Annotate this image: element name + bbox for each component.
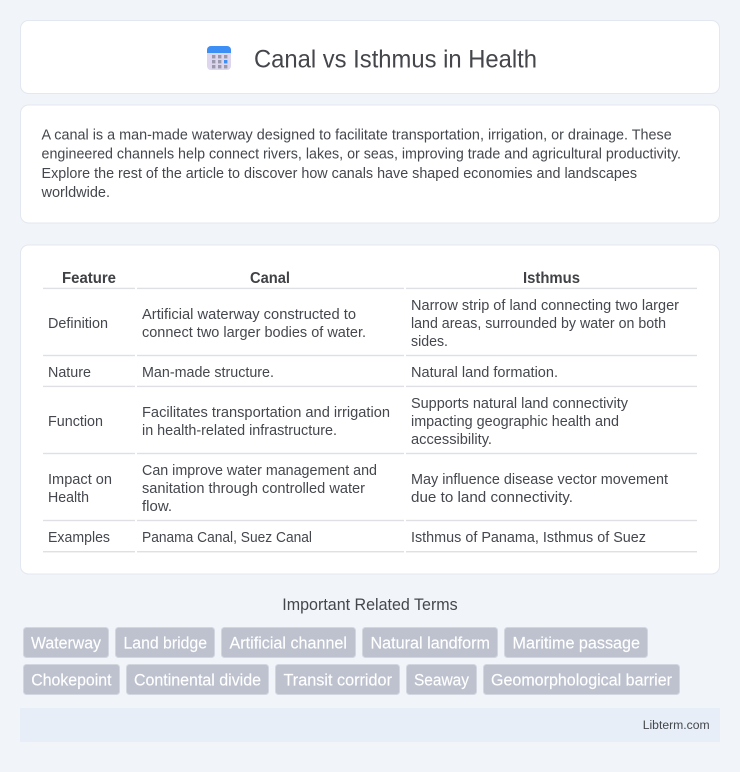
tag: seaway: Seaway: [414, 670, 470, 689]
text block: introduction paragraph: worldwide.: [41, 185, 110, 201]
table row: definition: [48, 298, 679, 350]
table row: function: impacting geographic health and: [411, 414, 619, 430]
title: Canal vs Isthmus in Health: [254, 46, 537, 73]
tag: land bridge: Land bridge: [124, 633, 207, 652]
table row: examples: [48, 530, 646, 546]
icon: calendar: [207, 46, 231, 70]
tag: transit corridor: Transit corridor: [284, 670, 392, 689]
tag: artificial channel: [222, 628, 356, 658]
table row: definition: sides.: [411, 334, 448, 350]
table row: function: [48, 396, 629, 448]
table row: nature: Nature: [48, 365, 91, 381]
footer: Libterm.com: [643, 718, 710, 732]
table header row: Isthmus: [523, 270, 580, 287]
panel: title header: [20, 20, 720, 94]
table row: function: Supports natural land connectivity: [411, 396, 629, 412]
text block: introduction paragraph: A canal is a man-made waterway designed to facilitate transportation, irrigation, or drainage. These: [42, 127, 672, 143]
tag: natural landform: [362, 628, 498, 658]
table row: definition: Artificial waterway constructed to: [142, 307, 356, 323]
table row: impact on health: Impact on: [48, 472, 112, 488]
text block: introduction paragraph: engineered channels help connect rivers, lakes, or seas, improving trade and agricultural productivity.: [42, 147, 681, 163]
table row: nature: [48, 365, 558, 381]
panel: introduction: [20, 105, 720, 223]
table row: nature: Natural land formation.: [411, 365, 558, 381]
tag: chokepoint: Chokepoint: [31, 670, 112, 689]
table header row: [62, 270, 580, 287]
table row: examples: Panama Canal, Suez Canal: [142, 530, 312, 546]
table row: examples: Examples: [48, 530, 110, 546]
table row: impact on health: Health: [48, 490, 89, 506]
table row: function: accessibility.: [411, 432, 492, 448]
table row: impact on health: Can improve water management and: [142, 463, 377, 479]
table row: function: in health-related infrastructure.: [142, 423, 337, 439]
table header row: Canal: [250, 270, 290, 287]
table header row: Feature: [62, 270, 116, 287]
tag: maritime passage: Maritime passage: [512, 633, 640, 652]
tag: geomorphological barrier: [484, 664, 680, 694]
tag: natural landform: Natural landform: [370, 633, 490, 652]
tag: artificial channel: Artificial channel: [230, 633, 347, 652]
tag: chokepoint: [24, 664, 120, 694]
table row: impact on health: flow.: [142, 499, 172, 515]
table row: definition: land areas, surrounded by water on both: [411, 316, 666, 332]
tag: continental divide: [126, 664, 268, 694]
footer: [20, 708, 720, 742]
table row: impact on health: due to land connectivity.: [411, 490, 573, 506]
table row: function: Facilitates transportation and irrigation: [142, 405, 390, 421]
table row: definition: Definition: [48, 316, 108, 332]
table row: impact on health: [48, 463, 668, 515]
tag: transit corridor: [276, 664, 400, 694]
tag: waterway: [24, 628, 108, 658]
tag: geomorphological barrier: Geomorphological barrier: [491, 670, 672, 689]
tag: land bridge: [116, 628, 214, 658]
table row: definition: Narrow strip of land connecting two larger: [411, 298, 679, 314]
tag group: related terms: [24, 628, 680, 694]
table row: function: Function: [48, 414, 103, 430]
text block: introduction paragraph: [41, 127, 681, 201]
table row: impact on health: sanitation through controlled water: [142, 481, 365, 497]
panel: comparison table: [20, 245, 720, 574]
tag: maritime passage: [504, 628, 648, 658]
table row: definition: connect two larger bodies of water.: [142, 325, 366, 341]
text block: introduction paragraph: Explore the rest of the article to discover how canals have shaped economies and landscapes: [42, 166, 637, 182]
table row: impact on health: May influence disease vector movement: [411, 472, 668, 488]
tag: seaway: [406, 664, 476, 694]
tag: continental divide: Continental divide: [134, 670, 261, 689]
table row: nature: Man-made structure.: [142, 365, 274, 381]
table row: examples: Isthmus of Panama, Isthmus of Suez: [411, 530, 646, 546]
heading: important related terms: Important Related Terms: [282, 596, 458, 614]
tag: waterway: Waterway: [31, 633, 102, 652]
